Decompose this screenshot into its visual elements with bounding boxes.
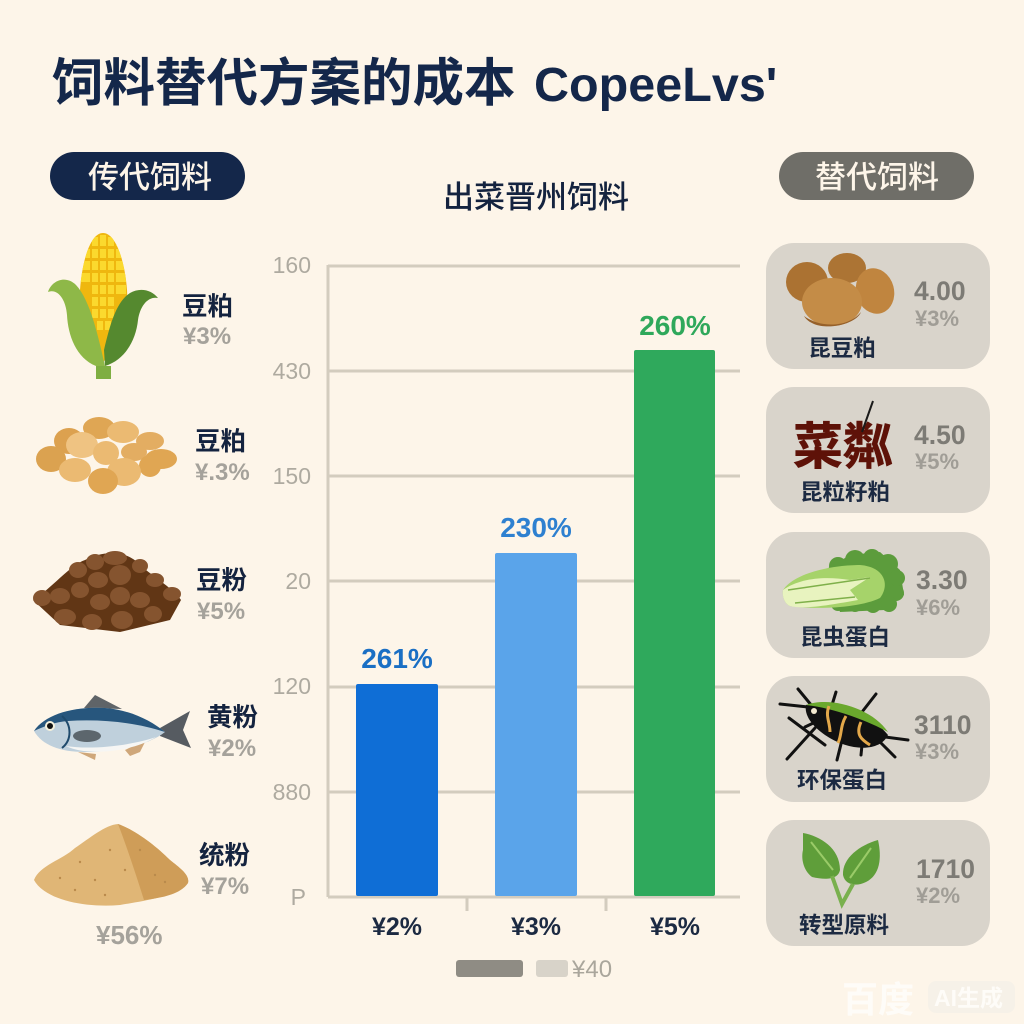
y axis labels: 160	[273, 252, 311, 278]
bar 2	[495, 553, 577, 896]
panel: card 2: ¥5%	[915, 449, 959, 474]
label: soybean meal pile: ¥5%	[197, 598, 245, 625]
icon: corn	[48, 233, 158, 379]
label: corn: ¥3%	[183, 323, 231, 350]
bar value labels	[361, 310, 711, 674]
pill heading: alternative feed	[779, 152, 974, 200]
panel: card 4: ¥3%	[915, 739, 959, 764]
panel: card 5: 转型原料	[799, 913, 889, 938]
panel: card 2	[766, 387, 990, 513]
y axis labels: 150	[273, 463, 311, 489]
bar 1	[356, 684, 438, 896]
label: corn	[182, 293, 233, 350]
icon: insect	[780, 689, 908, 760]
label: soybeans: ¥.3%	[195, 459, 250, 486]
panel: card 3	[766, 532, 990, 658]
icon: soybean meal pile	[33, 551, 181, 632]
panel: card 3: 昆虫蛋白	[800, 625, 890, 650]
chart subtitle: 出菜晋州饲料	[443, 180, 629, 215]
y axis labels	[273, 252, 311, 910]
panel: card 2: 4.50	[914, 420, 966, 450]
pill heading: alternative feed: 替代饲料	[815, 160, 939, 195]
left total: ¥56%	[96, 920, 162, 950]
label: fish: ¥2%	[208, 735, 256, 762]
label: powder pile: ¥7%	[201, 873, 249, 900]
legend: ¥40	[571, 956, 612, 983]
bar chart	[273, 252, 740, 941]
bar value labels: 230%	[500, 512, 572, 543]
panel: card 5: ¥2%	[916, 883, 960, 908]
icon: fish	[34, 695, 191, 760]
watermark: 百度	[842, 979, 914, 1020]
label: soybeans: 豆粕	[195, 428, 246, 456]
watermark	[842, 979, 1015, 1020]
y axis labels: 120	[273, 673, 311, 699]
y axis labels: 20	[285, 568, 311, 594]
icon: cabbage	[783, 549, 905, 613]
pill heading: traditional feed	[50, 152, 245, 200]
label: soybeans	[195, 428, 250, 486]
icon: leaves	[802, 833, 880, 904]
panel: card 3: ¥6%	[916, 595, 960, 620]
watermark: AI生成	[934, 985, 1003, 1011]
panel: card 4	[766, 676, 990, 802]
legend	[456, 956, 612, 983]
icon: powder pile	[34, 824, 188, 906]
x axis labels: ¥3%	[511, 913, 561, 941]
bar 3	[634, 350, 715, 896]
label: powder pile: 统粉	[199, 842, 250, 870]
panel: card 1: 昆豆粕	[808, 336, 876, 361]
label: powder pile	[199, 842, 250, 900]
icon: beans	[786, 253, 899, 326]
title: 饲料替代方案的成本	[52, 54, 516, 112]
label: soybean meal pile: 豆粉	[196, 567, 247, 595]
bar value labels: 260%	[639, 310, 711, 341]
label: fish: 黄粉	[207, 704, 258, 732]
panel: card 2: 昆粒籽粕	[800, 480, 890, 505]
y axis labels: P	[291, 884, 306, 910]
panel: card 1: ¥3%	[915, 306, 959, 331]
panel: card 3: 3.30	[916, 565, 968, 595]
panel: card 5	[766, 820, 990, 946]
title: CopeeLvs'	[534, 58, 777, 112]
panel: card 4: 环保蛋白	[797, 768, 887, 793]
panel: card 4: 3110	[914, 710, 972, 740]
y axis labels: 880	[273, 779, 311, 805]
panel: card 1	[766, 243, 990, 369]
icon: rapeseed glyph: 菜粼	[793, 419, 893, 475]
icon: soybeans	[36, 417, 177, 494]
x axis labels: ¥5%	[650, 913, 700, 941]
label: fish	[207, 704, 258, 762]
pill heading: traditional feed: 传代饲料	[88, 160, 212, 195]
label: corn: 豆粕	[182, 293, 233, 321]
y axis labels: 430	[273, 358, 311, 384]
x axis labels: ¥2%	[372, 913, 422, 941]
label: soybean meal pile	[196, 567, 247, 625]
panel: card 5: 1710	[916, 854, 975, 884]
bar value labels: 261%	[361, 643, 433, 674]
panel: card 1: 4.00	[914, 276, 966, 306]
x axis labels	[372, 913, 700, 941]
